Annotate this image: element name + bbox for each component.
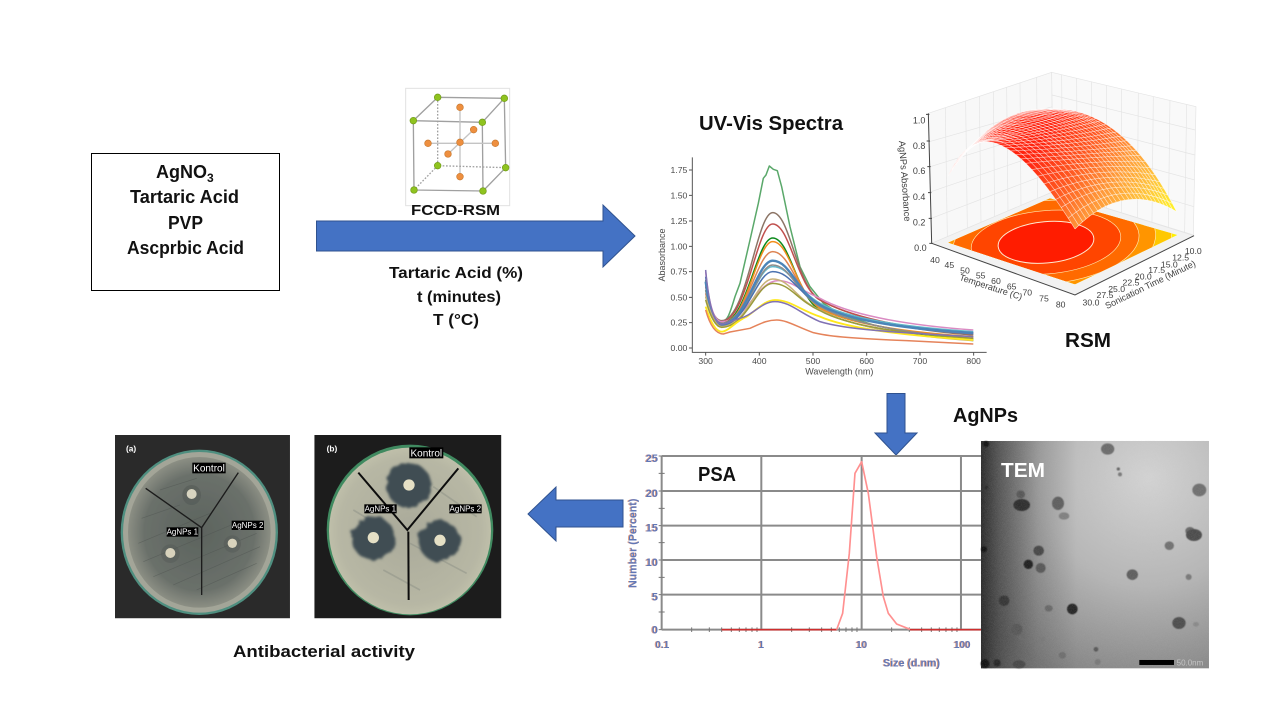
chart: RSM 3D surface: AgNPs Absorbance	[897, 140, 912, 222]
arrow: right	[316, 205, 635, 267]
photo: petri dish (a): Kontrol	[193, 463, 225, 474]
chart: UV-Vis spectra: 300	[698, 356, 713, 366]
chart: RSM 3D surface: 0.8	[913, 141, 925, 151]
photo: petri dish (a)	[115, 435, 290, 618]
text: AgNO3: AgNO	[156, 162, 207, 182]
chart: PSA size distribution: 100	[954, 640, 971, 651]
chart: UV-Vis spectra: 600	[859, 356, 874, 366]
chart: RSM 3D surface: 27.5	[1097, 290, 1114, 300]
text: variables: Tartaric Acid (%)	[389, 265, 523, 282]
contour plane	[948, 198, 1178, 284]
text: AgNO3: 3	[207, 171, 214, 185]
chart: RSM 3D surface: 70	[1022, 287, 1032, 297]
photo: petri dish (b): Kontrol	[411, 448, 442, 459]
text: variables	[389, 265, 523, 329]
chart: RSM 3D surface: 55	[976, 271, 986, 281]
chart: RSM 3D surface: 22.5	[1123, 277, 1140, 287]
chart: UV-Vis spectra: 0.25	[670, 318, 688, 328]
chart: RSM 3D surface: 80	[1056, 299, 1066, 309]
chart: PSA size distribution: 10	[856, 640, 868, 651]
surface pale left edge	[948, 109, 1177, 229]
chart: UV-Vis spectra: 1.00	[670, 241, 688, 251]
photo: petri dish (a): (a)	[126, 443, 136, 453]
text: FCCD-RSM: FCCD-RSM	[411, 202, 500, 219]
chart: PSA size distribution	[628, 453, 982, 670]
left wall	[928, 72, 1053, 243]
chart: UV-Vis spectra	[657, 157, 987, 377]
chart: PSA size distribution: 10	[646, 557, 658, 569]
chart: RSM 3D surface: 40	[930, 255, 940, 265]
arrow: down	[875, 394, 917, 455]
heading: RSM: RSM	[1065, 330, 1111, 352]
chart: UV-Vis spectra: 1.50	[670, 190, 688, 200]
chart: RSM 3D surface: 0.6	[913, 166, 925, 176]
chart: PSA size distribution: Number (Percent)	[628, 498, 640, 588]
chart: RSM 3D surface: 30.0	[1083, 298, 1100, 308]
chart: RSM 3D surface: 75	[1039, 293, 1049, 303]
chart: PSA size distribution: 20	[646, 488, 658, 500]
heading: AgNPs: AgNPs	[953, 405, 1018, 427]
icon: FCCD cube diagram	[406, 88, 510, 206]
chart: RSM 3D surface: 45	[945, 260, 954, 270]
chart: RSM 3D surface: 1.0	[913, 115, 925, 125]
surface mesh	[948, 109, 1177, 229]
chart: RSM 3D surface: Temperature (C)	[958, 272, 1024, 302]
chart: RSM 3D surface: 0.2	[913, 218, 925, 228]
chart: UV-Vis spectra: Abasorbance	[657, 229, 667, 281]
text: Tartaric Acid: Tartaric Acid	[130, 187, 239, 207]
chart: PSA size distribution: 0.1	[655, 640, 670, 651]
heading: Antibacterial activity: Antibacterial activity	[233, 642, 416, 661]
chart: RSM 3D surface: Sonication Time (Minute)	[1103, 258, 1197, 311]
photo: petri dish (a): AgNPs 2	[232, 521, 264, 530]
chart: RSM 3D surface: 10.0	[1185, 246, 1202, 256]
label: TEM: TEM	[1001, 460, 1045, 482]
chart: RSM 3D surface: 17.5	[1148, 265, 1165, 275]
chart: RSM 3D surface: 0.0	[914, 243, 927, 253]
right wall	[1052, 72, 1196, 235]
chart: RSM 3D surface: 20.0	[1135, 272, 1152, 282]
chart: PSA size distribution: 15	[646, 523, 658, 535]
text: variables: t (minutes)	[417, 289, 501, 306]
heading: UV-Vis Spectra: UV-Vis Spectra	[699, 113, 844, 135]
chart: RSM 3D surface: 15.0	[1161, 259, 1178, 269]
photo: petri dish (b)	[314, 435, 501, 618]
chart: UV-Vis spectra: 0.00	[670, 343, 688, 353]
chart: UV-Vis spectra: 700	[913, 356, 927, 366]
chart: PSA size distribution: 25	[646, 453, 658, 465]
scale bar	[1139, 658, 1204, 667]
chart: RSM 3D surface: 60	[991, 276, 1001, 286]
chart: RSM 3D surface: 12.5	[1172, 253, 1189, 263]
chart: UV-Vis spectra: 0.75	[670, 267, 688, 277]
arrow: left	[528, 487, 623, 541]
chart: PSA size distribution: 1	[759, 640, 765, 651]
text: Ascprbic Acid: Ascprbic Acid	[127, 238, 244, 258]
chart: RSM 3D surface: 25.0	[1108, 284, 1125, 294]
chart: PSA size distribution: 5	[652, 592, 658, 604]
chart: UV-Vis spectra: 400	[752, 356, 767, 366]
chart: PSA size distribution: 0	[652, 625, 658, 637]
chart: RSM 3D surface: 0.4	[913, 192, 925, 202]
chart: PSA size distribution: Size (d.nm)	[883, 658, 941, 670]
chart: UV-Vis spectra: 500	[806, 356, 820, 366]
chart: UV-Vis spectra: Wavelength (nm)	[805, 367, 873, 377]
panel: precursors box	[92, 154, 280, 290]
chart: UV-Vis spectra: 1.75	[670, 165, 688, 175]
photo: petri dish (a): AgNPs 1	[167, 528, 199, 537]
chart: UV-Vis spectra: 0.50	[670, 292, 688, 302]
floor	[932, 192, 1194, 295]
photo: TEM micrograph	[981, 441, 1209, 668]
photo: petri dish (b): AgNPs 1	[365, 504, 397, 513]
chart: UV-Vis spectra: 1.25	[670, 216, 688, 226]
chart: RSM 3D surface	[897, 72, 1202, 316]
text: PVP: PVP	[168, 213, 203, 233]
scale bar: 50.0nm	[1177, 658, 1204, 667]
chart: UV-Vis spectra: 800	[966, 356, 981, 366]
surface	[948, 109, 1177, 229]
photo: petri dish (b): (b)	[327, 443, 338, 453]
text: variables: T (°C)	[433, 312, 479, 329]
photo: petri dish (b): AgNPs 2	[450, 504, 482, 513]
label: PSA: PSA	[698, 464, 736, 486]
chart: RSM 3D surface: 50	[960, 266, 970, 276]
chart: RSM 3D surface: 65	[1007, 282, 1017, 292]
